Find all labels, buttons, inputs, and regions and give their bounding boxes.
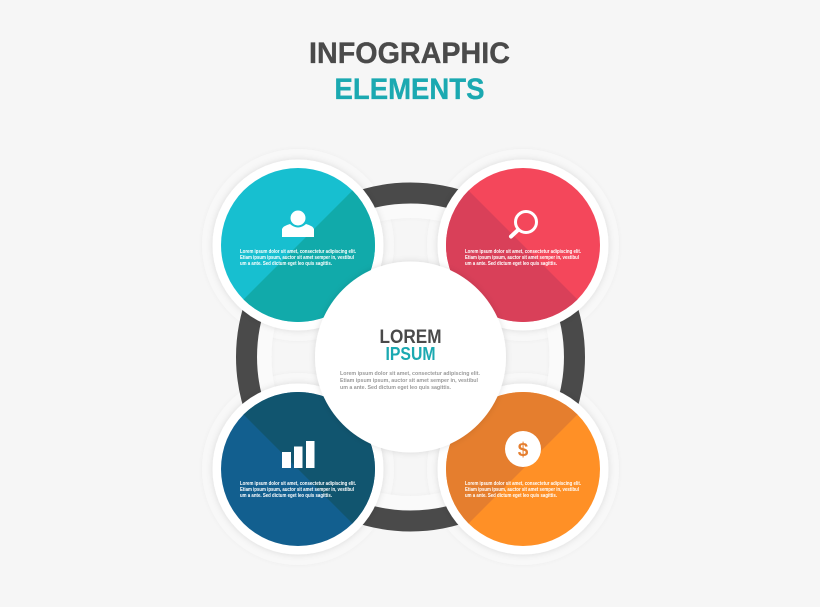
panel: blue chart — [212, 384, 384, 554]
text block: Etiam ipsum ipsum, auctor sit amet semper in, vestibul — [340, 378, 478, 384]
text block: Etiam ipsum ipsum, auctor sit amet semper in, vestibul — [465, 255, 579, 261]
text block — [465, 249, 581, 267]
text block: Lorem ipsum dolor sit amet, consectetur adipiscing elit. — [240, 249, 356, 255]
text block: um a ante. Sed dictum eget leo quis sagittis. — [465, 261, 557, 267]
text block: um a ante. Sed dictum eget leo quis sagittis. — [465, 493, 557, 499]
text block — [240, 249, 356, 267]
text block — [340, 371, 480, 391]
text block: um a ante. Sed dictum eget leo quis sagittis. — [240, 493, 332, 499]
text block: Lorem ipsum dolor sit amet, consectetur adipiscing elit. — [240, 481, 356, 487]
icon: magnifier — [511, 212, 536, 236]
title: INFOGRAPHIC — [309, 37, 510, 70]
panel: red search — [438, 160, 608, 330]
panel: teal person — [212, 160, 384, 330]
halos — [202, 149, 619, 565]
text block: Lorem ipsum dolor sit amet, consectetur adipiscing elit. — [465, 249, 581, 255]
title — [309, 37, 510, 106]
panel: orange dollar — [438, 384, 608, 554]
icon: person — [282, 210, 314, 237]
text block: Lorem ipsum dolor sit amet, consectetur adipiscing elit. — [465, 481, 581, 487]
text block: um a ante. Sed dictum eget leo quis sagittis. — [240, 261, 332, 267]
text block: Etiam ipsum ipsum, auctor sit amet semper in, vestibul — [240, 255, 354, 261]
text block: Etiam ipsum ipsum, auctor sit amet semper in, vestibul — [465, 487, 579, 493]
text block: um a ante. Sed dictum eget leo quis sagittis. — [340, 385, 451, 391]
heading — [380, 326, 442, 364]
ring connector — [246, 193, 574, 521]
icon: bar chart — [282, 441, 314, 468]
panel: center — [315, 262, 506, 452]
text block — [465, 481, 581, 499]
text block: Lorem ipsum dolor sit amet, consectetur adipiscing elit. — [340, 371, 480, 377]
heading: IPSUM — [386, 344, 436, 364]
heading: LOREM — [380, 326, 442, 348]
text block: Etiam ipsum ipsum, auctor sit amet semper in, vestibul — [240, 487, 354, 493]
text block — [240, 481, 356, 499]
title: ELEMENTS — [334, 73, 484, 106]
icon: dollar: $ — [518, 440, 529, 461]
icon: dollar — [505, 431, 541, 467]
